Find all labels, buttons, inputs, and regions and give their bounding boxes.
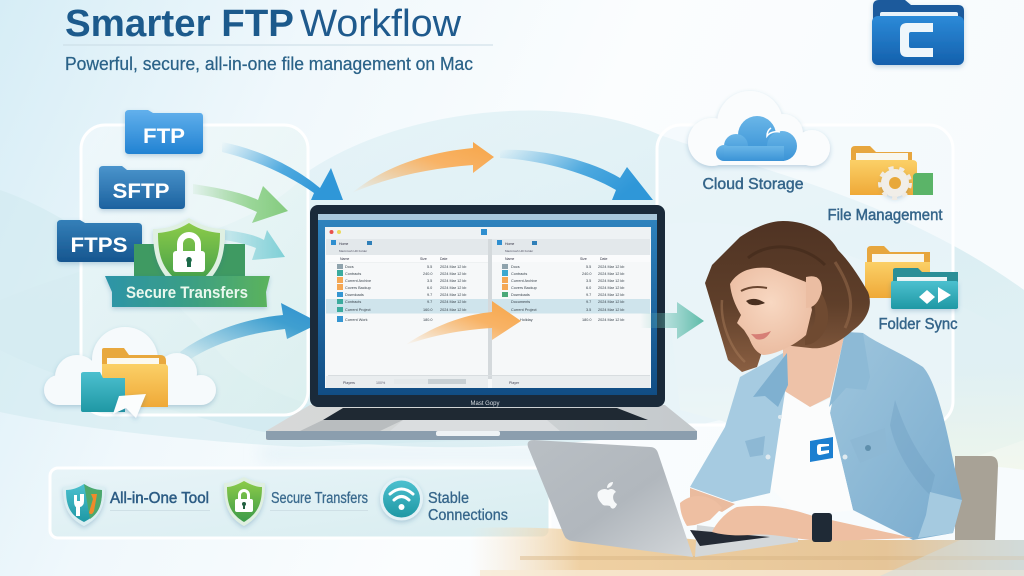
file rows right: Downloads [511,293,530,297]
pocket right [850,428,887,463]
file rows right: 2024 Mar 12 kb [598,272,624,276]
arrow: SFTP to laptop [193,184,288,223]
collar right [829,332,870,407]
file rows left: 9.7 [427,300,432,304]
file rows left: 2024 Mar 12 kb [440,279,466,283]
file rows right: 2024 Mar 12 kb [598,265,624,269]
file rows right: Docs [511,265,520,269]
shirt logo [810,437,833,462]
file rows right: 2024 Mar 12 kb [598,279,624,283]
file manager window: Name [340,257,349,261]
file rows right: Current Project [511,308,537,312]
file rows left: 2024 Mar 12 kb [440,308,466,312]
icon: FTP folder: FTP [143,125,185,148]
icon: folder sync [865,246,958,309]
icon: SFTP folder [99,166,185,209]
icon: SFTP folder: SFTP [112,180,170,203]
blue cloud [716,116,797,161]
file rows right: 3.5 [586,308,591,312]
file rows right: 180.0 [582,318,592,322]
icon: FTP folder [125,110,203,154]
brow [741,287,767,291]
file manager window: Players [343,381,355,385]
file rows left: Covers Backup [345,286,371,290]
icon: wifi circle [380,478,423,520]
badge: secure transfers: Secure Transfers [126,284,248,302]
label: stable connections: Stable [428,490,469,507]
file manager window: Home [339,242,348,246]
ear [806,276,822,308]
icon: brand folder logo [872,0,964,65]
file manager window [325,227,651,388]
icon: cloud storage [688,91,830,166]
arrow: orange across panes [405,301,521,345]
file manager window: Size [420,257,427,261]
label: stable connections [428,490,508,524]
file manager window: 100% [376,381,386,385]
label: folder sync: Folder Sync [878,316,958,333]
file manager window: Macintosh HD Folder [339,249,367,253]
file rows right: 2024 Mar 12 kb [598,308,624,312]
screen [318,214,657,395]
icon: all-in-one shield [63,481,105,526]
hands [680,488,913,542]
file manager window: Date [440,257,447,261]
file rows right: Contracts [511,272,527,276]
cloud shape [44,327,216,405]
file manager window: Home [505,242,514,246]
file rows left: 6.0 [427,286,432,290]
neck [783,333,845,407]
file rows left: 2024 Mar 12 kb [440,265,466,269]
arrow: orange top [352,142,494,193]
file rows right: Holiday [520,318,533,322]
file rows left [337,264,466,322]
file rows left: 5.5 [427,265,432,269]
file rows left: 2024 Mar 12 kb [440,293,466,297]
file rows right: 240.0 [582,272,592,276]
file rows left: 9.7 [427,293,432,297]
file rows left: Downloads [345,293,364,297]
t-shirt [770,390,853,512]
chair [955,456,998,540]
file rows right: 2024 Mar 12 kb [598,286,624,290]
jacket right front [830,332,962,540]
laptop: large display: Mast Gopy [470,401,500,407]
file manager window: Name [505,257,514,261]
label: secure transfers: Secure Transfers [271,490,368,507]
file rows right: 2024 Mar 12 kb [598,318,624,322]
file rows left: 160.0 [423,308,433,312]
arrow: cloud to laptop [180,303,320,362]
icon: FTPS folder [57,220,142,262]
watch [812,513,832,542]
file rows right: Documents [511,300,530,304]
white cloud [688,91,830,166]
person [690,221,962,540]
file rows right: 9.7 [586,293,591,297]
file rows right: Covers Backup [511,286,537,290]
icon: FTPS folder: FTPS [70,234,128,257]
panel: protocols [81,125,308,415]
jacket buttons [766,415,848,460]
file rows left: 2024 Mar 12 kb [440,272,466,276]
label: stable connections: Connections [428,507,508,524]
jacket shade [890,400,935,495]
file rows right: 9.7 [586,300,591,304]
label: cloud storage: Cloud Storage [702,176,804,193]
file rows left: Contracts [345,272,361,276]
arrow: teal to person [640,302,704,339]
file rows left: Contracts [345,300,361,304]
badge: secure transfers [105,218,270,307]
file rows left: 3.5 [427,279,432,283]
panel: destinations [657,125,953,425]
file rows right [502,264,624,322]
file manager window: Date [600,257,607,261]
file rows left: Docs [345,265,354,269]
title [65,3,462,45]
arrow: FTP to laptop [222,142,343,200]
file rows right: 2024 Mar 12 kb [598,293,624,297]
file rows left: Current Project [345,308,371,312]
arrow: blue top [500,150,653,200]
file rows right: Current Archive [511,279,537,283]
face [730,268,812,355]
file rows left: 180.0 [423,318,433,322]
file manager window: Player [509,381,520,385]
file rows left: Current Work [345,318,368,322]
hair front strand [805,280,828,345]
jacket left sleeve [690,353,785,502]
file rows right: 6.0 [586,286,591,290]
hair back [705,221,870,372]
cuff [918,492,962,538]
file rows left: 240.0 [423,272,433,276]
title: Workflow [300,3,462,45]
title: Smarter FTP [65,3,294,45]
collar left [753,353,788,407]
label: file management: File Management [828,207,943,224]
ribbon [105,276,270,307]
arrow: FTPS to laptop [225,230,285,260]
subtitle: Powerful, secure, all-in-one file management on Mac [65,53,473,74]
file rows left: Current Archive [345,279,371,283]
mouth [751,331,771,340]
icon: secure shield [224,477,265,526]
icon: green shield with lock [153,218,225,294]
laptop base [266,405,697,440]
laptop: foreground base [690,525,798,557]
label: all-in-one tool: All-in-One Tool [110,490,209,507]
file rows left: 2024 Mar 12 kb [440,300,466,304]
apple logo [597,482,617,509]
feature bar [50,468,550,538]
file rows left: 2024 Mar 12 kb [440,286,466,290]
eye [746,299,765,305]
icon: file management folder [850,146,933,198]
file manager window: Macintosh HD Folder [505,249,533,253]
file rows right: 5.5 [586,265,591,269]
file rows right: 2024 Mar 12 kb [598,300,624,304]
file rows right: 3.5 [586,279,591,283]
laptop: large display [266,205,697,440]
laptop: foreground lid [528,440,693,557]
table [470,528,1024,576]
file manager window: Size [580,257,587,261]
icon: cloud with folders [44,327,216,418]
pocket left [745,436,765,457]
